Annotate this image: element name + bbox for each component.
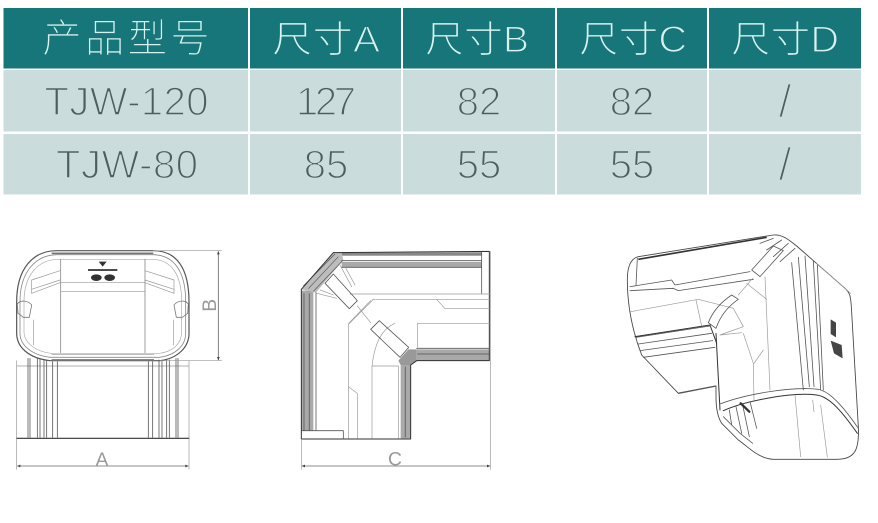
front view outer profile: [17, 251, 189, 361]
table header row: 尺寸C: [579, 19, 687, 60]
dimension A: [17, 438, 189, 471]
table: product dimensions: [4, 8, 861, 194]
diagram: front view with dimensions A and B: [17, 251, 222, 471]
table header row: 尺寸B: [425, 19, 529, 60]
table header row: 产品型号: [42, 18, 210, 61]
icon: embossed logo mark: [88, 262, 117, 281]
right body ribs: [716, 238, 851, 410]
table row: TJW-80: /: [779, 138, 792, 190]
elbow slots: [325, 274, 409, 357]
open end: [720, 389, 858, 457]
table row: TJW-80: 85: [304, 143, 348, 187]
table row: TJW-120: 82: [457, 80, 501, 124]
dimension C: [301, 251, 491, 470]
logo mark on side: [831, 319, 843, 358]
left arm details: [630, 258, 753, 357]
front view lower body: [17, 358, 189, 438]
table row: TJW-120: 82: [610, 80, 654, 124]
table header row: [4, 8, 861, 68]
elbow outlines: [301, 251, 489, 439]
dimension B: B: [200, 299, 221, 312]
elbow shaded bands: [301, 252, 489, 438]
table row: TJW-120: /: [779, 75, 792, 127]
diagram: side elbow view with dimension C: [301, 251, 491, 470]
dimension A: A: [96, 450, 109, 471]
dimension C: C: [388, 449, 402, 470]
diagram: 3D perspective elbow: [627, 235, 858, 459]
table row: TJW-80: TJW-80: [56, 143, 198, 187]
slots: [708, 246, 783, 328]
elbow silhouette: [627, 235, 858, 459]
table row: TJW-80: [4, 134, 861, 194]
table header row: 尺寸D: [731, 19, 839, 60]
dimension B: [153, 251, 222, 361]
table header row: 尺寸A: [272, 19, 380, 60]
table row: TJW-120: 127: [296, 80, 356, 124]
table row: TJW-120: [4, 70, 861, 132]
table row: TJW-80: 55: [457, 143, 501, 187]
table row: TJW-120: TJW-120: [44, 80, 208, 124]
table row: TJW-80: 55: [610, 143, 654, 187]
